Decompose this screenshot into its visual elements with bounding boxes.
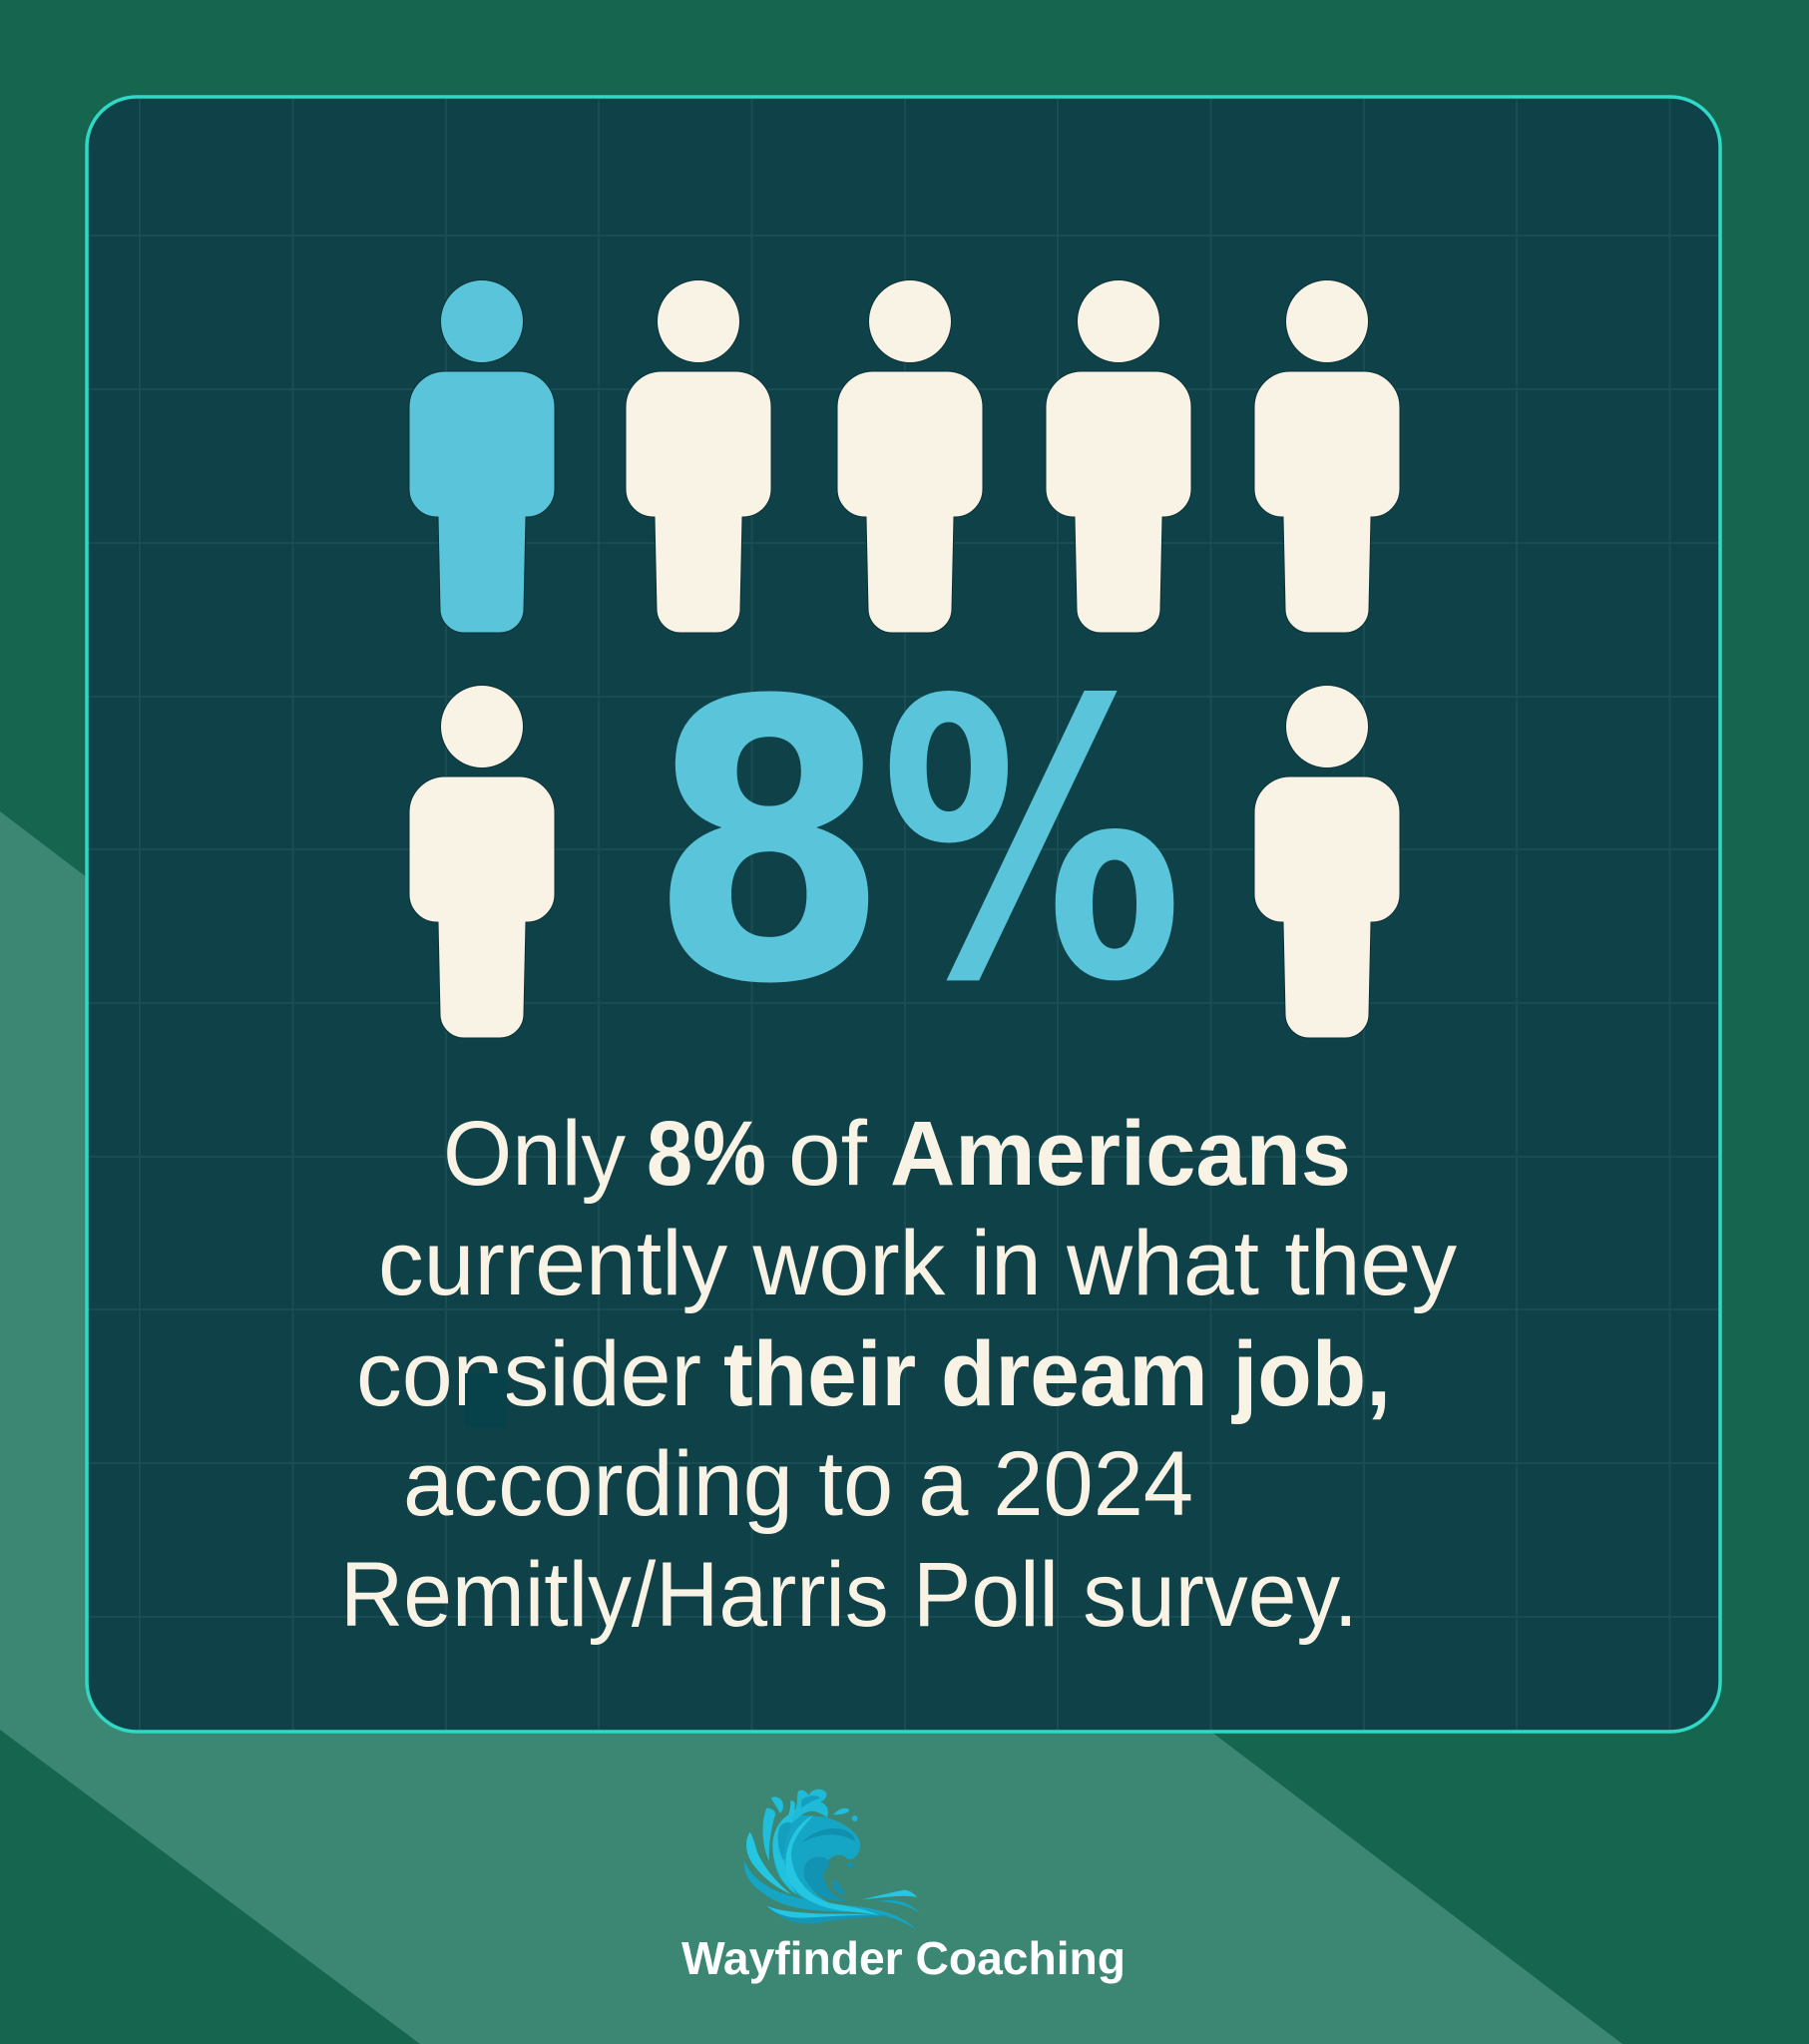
icon: person 7 [1254,685,1400,1038]
text block: main statement [340,1103,1457,1646]
icon: person 6 [409,685,555,1038]
logo: brand name: Wayfinder Coaching [681,1932,1126,1984]
icon: person 5 [1254,279,1400,633]
text block: main statement: Only [443,1103,626,1205]
text block: main statement: consider [356,1323,701,1425]
icon: person 3 [837,279,983,633]
text block: main statement: according to a 2024 [403,1433,1193,1535]
icon: person 4 [1046,279,1191,633]
big statistic: 8%: 8 [649,620,890,1068]
panel: main card [87,97,1720,1732]
text block: main statement: their dream job, [723,1323,1391,1425]
text block: main statement: of [788,1103,867,1205]
text artifact patch [465,1373,507,1427]
people icons row [409,279,1400,1038]
text block: main statement: 8% [647,1103,766,1205]
icon: highlighted person [409,279,555,633]
text block: main statement: currently work in what they [378,1213,1457,1314]
big statistic: 8% [649,620,1183,1068]
big statistic: 8%: % [880,620,1183,1066]
icon: person 2 [626,279,771,633]
text block: main statement: Americans [890,1103,1351,1205]
logo: wave [744,1789,920,1930]
text block: main statement: Remitly/Harris Poll survey. [340,1544,1358,1646]
background diagonal band [0,811,1622,2044]
